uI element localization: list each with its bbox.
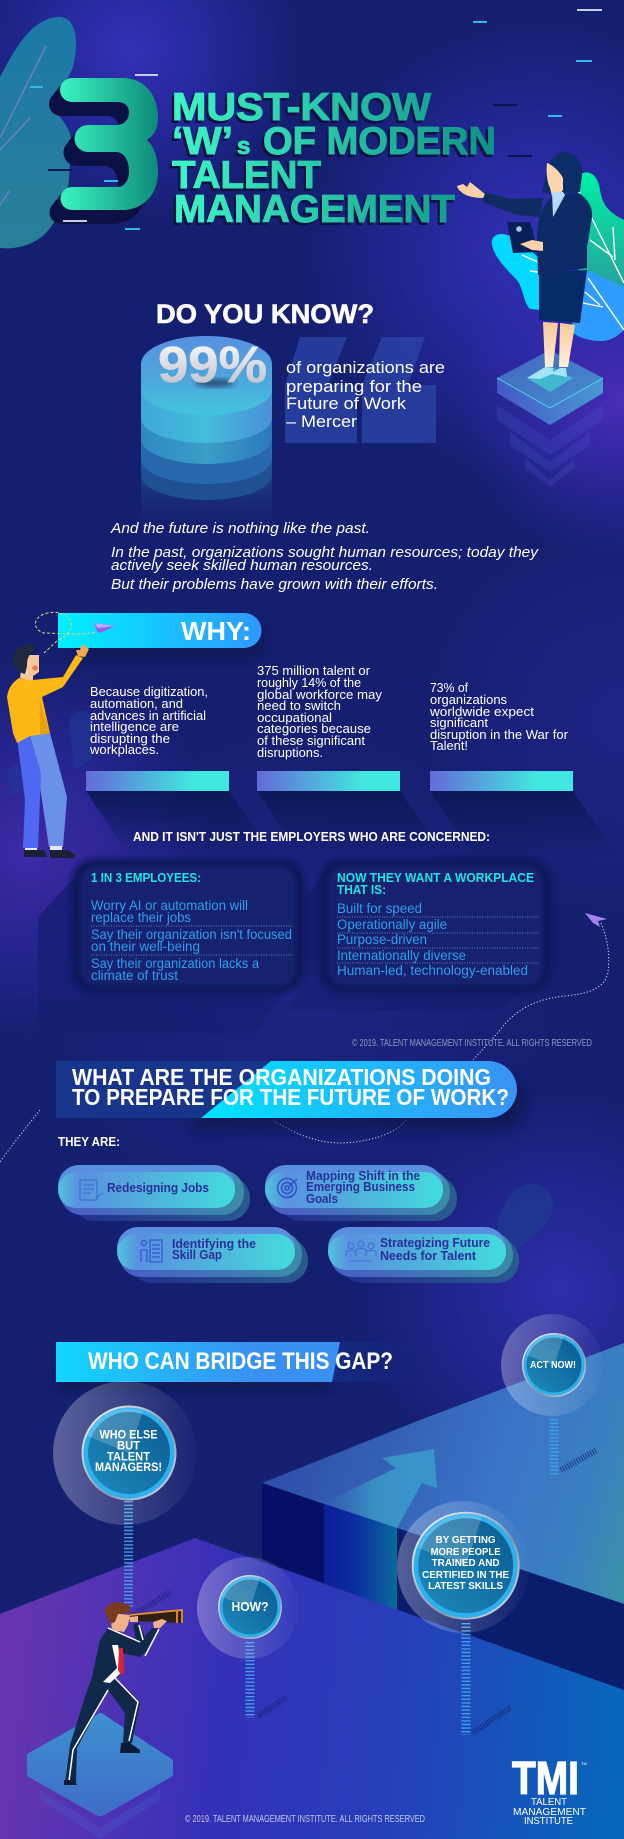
title text: MUST-KNOW xyxy=(172,86,431,129)
title text: MANAGEMENT xyxy=(172,191,453,234)
icon: target xyxy=(278,1178,297,1198)
circle: by getting more people trained: LATEST SKILLS xyxy=(428,1580,503,1592)
TMI logo: TMI xyxy=(512,1752,579,1804)
panel: 1 in 3 employees: replace their jobs xyxy=(91,910,191,925)
column 3 text: worldwide expect xyxy=(429,704,534,719)
stat description text: – Mercer xyxy=(286,413,358,431)
decorative dashes xyxy=(30,10,602,229)
column 1 text xyxy=(89,684,208,757)
man xyxy=(64,1602,182,1785)
column 3 text: Talent! xyxy=(430,738,468,753)
column 2 text: need to switch xyxy=(257,698,341,713)
circle: how xyxy=(197,1557,299,1659)
title text: TALENT xyxy=(170,157,319,200)
circle: act now: ACT NOW! xyxy=(530,1359,576,1371)
upper platform top face xyxy=(262,1343,624,1604)
TMI logo: TM xyxy=(581,1761,587,1766)
stacked cylinder chart xyxy=(141,336,272,525)
title text: ‘W’ xyxy=(170,123,231,166)
column 2 text: of these significant xyxy=(257,733,365,748)
circle: who else but talent managers: WHO ELSE xyxy=(100,1430,158,1442)
panel: desired workplace: Internationally diverse xyxy=(337,948,466,963)
panel: 1 in 3 employees: on their well-being xyxy=(91,939,200,954)
panel: 1 in 3 employees: climate of trust xyxy=(91,968,178,983)
stat description text: Future of Work xyxy=(286,395,407,413)
column 2 text: occupational xyxy=(257,710,332,725)
faint blobs behind yellow figure xyxy=(7,710,92,795)
circle: by getting more people trained: CERTIFIED IN THE xyxy=(422,1569,509,1581)
banner: what are the organizations doing xyxy=(56,1061,524,1130)
pill: strategizing future needs: Strategizing Future xyxy=(380,1236,490,1250)
employers concerned heading: AND IT ISN'T JUST THE EMPLOYERS WHO ARE CONCERNED: xyxy=(133,830,490,844)
stat description text: of organizations are xyxy=(286,359,445,377)
TMI logo: TALENT xyxy=(531,1796,568,1808)
panel: desired workplace: THAT IS: xyxy=(337,883,386,897)
pill: identifying the skill gap: Identifying the xyxy=(172,1237,256,1251)
bottom stepped platforms xyxy=(0,1343,624,1839)
panel: 1 in 3 employees: Worry AI or automation will xyxy=(91,898,248,913)
panel shadows xyxy=(38,880,551,1033)
illustration: presenter woman with plants and platform xyxy=(457,152,624,487)
banner: what are the organizations doing: WHAT ARE THE ORGANIZATIONS DOING xyxy=(72,1064,491,1090)
title text: MANAGEMENT xyxy=(174,188,455,231)
intro italic text xyxy=(110,521,539,593)
pill: identifying the skill gap xyxy=(117,1227,308,1283)
title text xyxy=(170,86,496,234)
TMI logo xyxy=(512,1752,587,1827)
panel: desired workplace: Purpose-driven xyxy=(337,932,427,947)
circle: act now xyxy=(501,1314,603,1416)
panel: 1 in 3 employees xyxy=(72,859,304,992)
banner: what are the organizations doing: TO PREPARE FOR THE FUTURE OF WORK? xyxy=(72,1084,509,1110)
icon: paper plane xyxy=(585,913,607,927)
panel: desired workplace: Built for speed xyxy=(337,901,422,916)
dotted stems and hatches xyxy=(128,1419,597,1735)
circle: who else but talent managers: TALENT xyxy=(107,1452,150,1464)
why banner xyxy=(35,612,266,658)
title: big numeral 3 xyxy=(49,78,158,224)
plants behind the woman xyxy=(492,172,624,341)
column 1 text: automation, and xyxy=(90,696,183,711)
column 1 text: advances in artificial xyxy=(90,708,206,723)
title text: OF MODERN xyxy=(263,120,496,163)
column 3 text: significant xyxy=(430,715,488,730)
do you know heading: DO YOU KNOW? xyxy=(156,299,374,329)
illustration: man in yellow sweater xyxy=(7,644,89,858)
column 2 text: disruptions. xyxy=(257,745,323,760)
column 2 text: categories because xyxy=(257,721,371,736)
banner: who can bridge this gap: WHO CAN BRIDGE THIS GAP? xyxy=(88,1348,393,1375)
pill: mapping shift xyxy=(265,1165,457,1221)
circle: by getting more people trained: MORE PEOPLE xyxy=(431,1546,501,1558)
title text: s xyxy=(237,133,250,160)
intro italic text: actively seek skilled human resources. xyxy=(111,558,373,574)
column 2 text: roughly 14% of the xyxy=(257,675,361,690)
pill: mapping shift: Goals xyxy=(306,1192,338,1206)
dashed flight path xyxy=(35,612,95,653)
panel: desired workplace: Operationally agile xyxy=(337,917,447,932)
panel: 1 in 3 employees: Say their organization lacks a xyxy=(91,956,259,971)
intro italic text: In the past, organizations sought human resources; today they xyxy=(111,545,539,561)
why banner: WHY: xyxy=(181,616,251,646)
icon: team xyxy=(346,1241,376,1261)
title text: s xyxy=(235,136,248,163)
circle: who else but talent managers: BUT xyxy=(117,1440,140,1452)
pill: mapping shift: Emerging Business xyxy=(306,1180,415,1194)
stat description text xyxy=(286,359,445,431)
woman figure xyxy=(457,152,592,379)
banner: who can bridge this gap xyxy=(56,1342,422,1389)
upper platform wall xyxy=(262,1483,624,1690)
pill: strategizing future needs xyxy=(328,1227,519,1283)
pill: redesigning jobs xyxy=(58,1165,250,1221)
column 1 text: workplaces. xyxy=(89,742,159,757)
column 3 text: 73% of xyxy=(430,680,468,695)
circle: by getting more people trained: BY GETTING xyxy=(436,1534,496,1546)
pill: redesigning jobs: Redesigning Jobs xyxy=(107,1181,209,1195)
column 3 text xyxy=(429,680,569,753)
circle: how: HOW? xyxy=(232,1599,269,1614)
column 2 text: 375 million talent or xyxy=(257,663,371,678)
platform xyxy=(27,1713,173,1839)
TMI logo: MANAGEMENT xyxy=(513,1806,587,1818)
column 2 text xyxy=(257,663,383,760)
circle: who else but talent managers: MANAGERS! xyxy=(95,1462,162,1474)
circle: who else but talent managers xyxy=(53,1381,197,1525)
panel: 1 in 3 employees: 1 IN 3 EMPLOYEES: xyxy=(91,871,201,885)
dotted flight path and plane xyxy=(0,913,609,1162)
column 2 text: global workforce may xyxy=(257,687,383,702)
arrow on upper platform xyxy=(324,1449,437,1528)
title text: OF MODERN xyxy=(261,123,494,166)
why columns xyxy=(86,663,616,855)
stat: 99 percent: 99% xyxy=(158,336,267,393)
platform xyxy=(497,350,603,487)
decorative leaf top left xyxy=(0,17,76,248)
icon: person and checklist xyxy=(141,1240,162,1262)
column 3 text: disruption in the War for xyxy=(430,727,569,742)
illustration: businessman with telescope on platform xyxy=(27,1602,182,1839)
pill: identifying the skill gap: Skill Gap xyxy=(172,1248,222,1262)
panel: desired workplace: NOW THEY WANT A WORKPLACE xyxy=(337,871,534,885)
circle: by getting more people trained xyxy=(397,1501,529,1633)
pill: mapping shift: Mapping Shift in the xyxy=(306,1169,420,1183)
icon: paper plane xyxy=(94,623,115,633)
they are label: THEY ARE: xyxy=(58,1135,120,1149)
column bars with long shadows xyxy=(86,771,616,855)
pill: strategizing future needs: Needs for Talent xyxy=(380,1249,477,1263)
column 1 text: intelligence are xyxy=(90,719,179,734)
stat description text: preparing for the xyxy=(286,378,422,396)
circle: by getting more people trained: TRAINED AND xyxy=(432,1557,500,1569)
TMI logo: INSTITUTE xyxy=(524,1815,573,1827)
intro italic text: But their problems have grown with their efforts. xyxy=(111,577,438,593)
intro italic text: And the future is nothing like the past. xyxy=(110,521,370,537)
column 1 text: Because digitization, xyxy=(90,684,208,699)
column 3 text: organizations xyxy=(430,692,507,707)
bottom copyright note: © 2019. TALENT MANAGEMENT INSTITUTE. ALL RIGHTS RESERVED xyxy=(185,1813,425,1825)
title text: TALENT xyxy=(172,154,321,197)
title text: ‘W’ xyxy=(172,120,233,163)
panel: desired workplace: Human-led, technology-enabled xyxy=(337,963,528,978)
icon: job document xyxy=(80,1180,103,1200)
faint leaf decoration xyxy=(496,1184,553,1265)
quote mark background xyxy=(285,337,436,443)
column 1 text: disrupting the xyxy=(90,731,170,746)
title text: MUST-KNOW xyxy=(170,89,429,132)
lower platform top face xyxy=(0,1538,624,1839)
panel: desired workplace xyxy=(320,859,551,992)
panel: 1 in 3 employees: Say their organization isn't focused xyxy=(91,927,292,942)
